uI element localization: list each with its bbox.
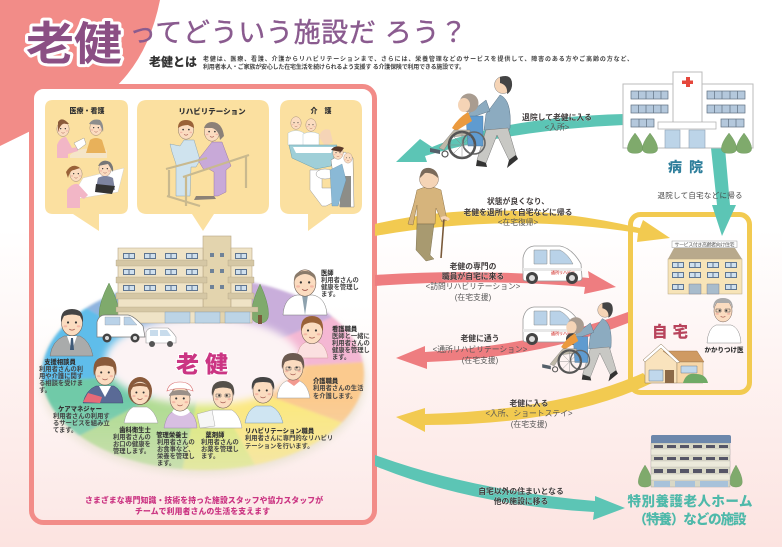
yellow box: 自宅: [630, 214, 750, 392]
arrow: hospital to 老健: [396, 114, 624, 162]
van: visit: [523, 246, 582, 284]
speech bubble: リハビリテーション: リハビリテーション: [178, 106, 246, 116]
label: short stay: 老健に入る: [510, 398, 548, 408]
staff: 介護職員: を介護します。: [313, 391, 356, 400]
label: discharge to 老健: 退院して老健に入る: [522, 112, 592, 122]
label: recover and go home: [464, 196, 572, 227]
intro text: [149, 54, 633, 71]
label: discharge to 老健: <入所>: [545, 122, 570, 132]
label: day rehabilitation: [433, 333, 528, 365]
staff: ケアマネジャー: 利用者さんの利用す: [53, 411, 110, 420]
arrow: to other facility: [375, 455, 625, 520]
staff: 医師: 健康を管理し: [321, 282, 359, 291]
label: short stay: <入所、ショートステイ>: [485, 408, 573, 418]
staff: 管理栄養士: お食事など、: [157, 444, 194, 453]
staff: 介護職員: [277, 353, 364, 400]
hospital: [623, 72, 753, 153]
staff: 歯科衛生士: 歯科衛生士: [119, 425, 151, 434]
staff: 看護職員: 医師と一緒に: [332, 331, 370, 340]
label: discharge to 老健: [522, 112, 592, 132]
speech bubble: 医療・看護: 医療・看護: [70, 106, 104, 115]
speech bubble: 医療・看護: [45, 100, 128, 231]
staff: リハビリテーション職員: [245, 377, 333, 450]
house: [643, 344, 708, 383]
staff: 支援相談員: す。: [39, 386, 51, 394]
family doctor: かかりつけ医: [704, 345, 744, 354]
staff: 看護職員: 健康を管理し: [332, 345, 370, 354]
label: 老健: 老健: [176, 351, 228, 377]
label: other facility: 他の施設に移る: [494, 496, 548, 506]
speech bubble: 介護: 介 護: [310, 106, 332, 115]
staff: 薬剤師: お薬を管理し: [201, 444, 239, 453]
staff: 介護職員: 利用者さんの生活: [313, 383, 364, 392]
staff: 看護職員: [297, 316, 370, 361]
arrow: 老健 to home yellow: [375, 210, 670, 242]
staff: 介護職員: 介護職員: [313, 376, 339, 385]
staff: 医師: 医師: [321, 268, 334, 277]
special nursing home: [638, 435, 742, 487]
intro text: 老健は、医療、看護、介護からリハビリテーションまで、さらには、栄養管理などのサービスを提供して、障害のある方やご高齢の方など、: [203, 55, 633, 63]
van: day care: [523, 307, 582, 345]
van: [146, 328, 176, 347]
staff: 医師: [283, 268, 359, 315]
label: recover and go home: 状態が良くなり、: [487, 196, 549, 206]
staff: リハビリテーション職員: リハビリテーション職員: [245, 426, 315, 435]
staff: ケアマネジャー: るサービスを組み立: [53, 418, 110, 427]
arrow: day rehab: [396, 312, 628, 369]
label: day rehabilitation: <通所リハビリテーション>: [433, 344, 528, 354]
panel caption: チームで利用者さんの生活を支えます: [135, 506, 270, 516]
staff: ケアマネジャー: ケアマネジャー: [58, 404, 102, 413]
label: visit rehabilitation: (在宅支援): [455, 292, 492, 302]
panel caption: [85, 495, 323, 516]
staff: 看護職員: 看護職員: [332, 324, 358, 333]
label: day rehabilitation: (在宅支援): [462, 355, 499, 365]
panel: 老健: [29, 84, 377, 525]
staff: 管理栄養士: 栄養を管理し: [157, 451, 195, 460]
intro text: 老健とは: [149, 54, 197, 69]
staff: リハビリテーション職員: 利用者さんに専門的なリハビリ: [245, 433, 333, 442]
speech bubble: 介護: [280, 100, 362, 231]
staff: 医師: ます。: [321, 290, 339, 298]
staff: 薬剤師: [197, 381, 242, 460]
label: discharge to home: 退院して自宅などに帰る: [658, 190, 742, 200]
service housing: [668, 241, 742, 294]
label: special nursing home: 特別養護老人ホーム: [628, 493, 753, 509]
label: visit rehabilitation: 老健の専門の: [450, 261, 497, 271]
staff: 支援相談員: [39, 309, 93, 394]
elder with cane: [408, 168, 449, 261]
staff: 薬剤師: 薬剤師: [206, 430, 225, 439]
label: 自宅: 自宅: [652, 322, 688, 341]
label: visit rehabilitation: 職員が自宅に来る: [442, 271, 504, 281]
label: other facility: 自宅以外の住まいとなる: [478, 486, 564, 496]
label: visit rehabilitation: <訪問リハビリテーション>: [426, 281, 521, 291]
staff: 歯科衛生士: 利用者さんの: [113, 432, 151, 441]
arrow: visit rehab: [375, 271, 616, 294]
label: short stay: (在宅支援): [511, 419, 548, 429]
label: short stay: [485, 398, 573, 429]
trees: [99, 283, 269, 324]
staff: 歯科衛生士: お口の健康を: [113, 439, 151, 448]
staff: 歯科衛生士: [113, 377, 158, 455]
arrow: hospital to home: [711, 148, 736, 236]
staff ring: [38, 282, 368, 476]
title: ってどういう施設だ ろう？: [129, 18, 467, 48]
label: special nursing home: （特養）などの施設: [634, 511, 747, 527]
family doctor: [704, 298, 744, 354]
label: 病院: 病院: [668, 159, 703, 175]
staff: 管理栄養士: ます。: [157, 459, 175, 467]
label: special nursing home: [628, 493, 753, 527]
wheelchair scene 2: [542, 302, 618, 381]
title: [26, 18, 467, 70]
label: recover and go home: <在宅復帰>: [498, 217, 539, 227]
staff: 支援相談員: 支援相談員: [44, 357, 76, 366]
service housing: サービス付き高齢者向け住宅: [674, 241, 734, 248]
staff: 管理栄養士: 管理栄養士: [156, 430, 188, 439]
staff: 看護職員: 利用者さんの: [332, 338, 370, 347]
title: 老健: [26, 18, 122, 70]
staff: リハビリテーション職員: テーションを行います。: [245, 441, 314, 450]
staff: 管理栄養士: 利用者さんの: [157, 437, 195, 446]
speech bubble: リハビリテーション: [137, 100, 269, 231]
pink corner shape: [0, 0, 160, 146]
ambulance: [97, 315, 145, 342]
label: recover and go home: 老健を退所して自宅などに帰る: [464, 207, 572, 217]
building: 老健: [116, 236, 258, 323]
arrow: short stay: [396, 373, 652, 432]
intro text: 利用者本人・ご家族が安心した在宅生活を続けられるよう支援す る介護保険で利用できる施設です。: [203, 63, 465, 71]
staff: ケアマネジャー: [53, 357, 123, 434]
icon: red cross: [682, 77, 693, 87]
staff: 支援相談員: る相談を受けま: [39, 378, 83, 387]
staff: 薬剤師: 利用者さんの: [201, 437, 239, 446]
staff: 歯科衛生士: 管理します。: [113, 446, 150, 455]
label: visit rehabilitation: [426, 261, 521, 302]
staff: 薬剤師: ます。: [201, 452, 219, 460]
staff: ケアマネジャー: てます。: [53, 426, 77, 434]
label: day rehabilitation: 老健に通う: [461, 333, 499, 343]
wheelchair scene: [430, 76, 518, 168]
staff: 医師: 利用者さんの: [321, 275, 359, 284]
staff: 支援相談員: 用や介護に関す: [39, 371, 83, 380]
label: other facility: [478, 486, 564, 506]
staff: 管理栄養士: [156, 382, 197, 467]
panel caption: さまざまな専門知識・技術を持った施設スタッフや協力スタッフが: [85, 495, 323, 505]
staff: 支援相談員: 利用者さんの利: [39, 364, 83, 373]
staff: 看護職員: ます。: [332, 353, 350, 361]
